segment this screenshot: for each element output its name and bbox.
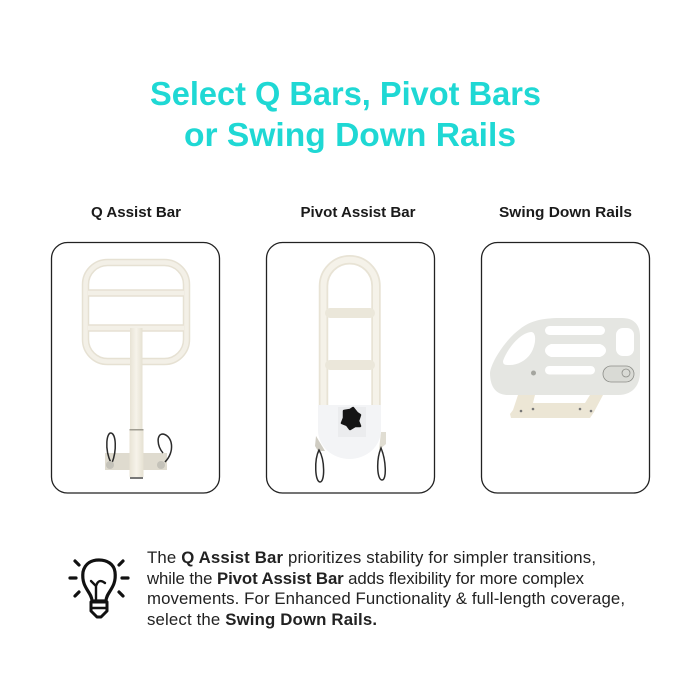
description text: The Q Assist Bar prioritizes stability for simpler transitions, [147, 548, 596, 567]
description text [146, 548, 625, 629]
title [150, 75, 541, 153]
product: pivot bar [315, 260, 386, 482]
product: Q bar [86, 262, 186, 479]
product: swing down rail [490, 318, 640, 418]
description text: select the Swing Down Rails. [147, 610, 377, 629]
panel: Pivot Assist Bar [266, 205, 434, 493]
panel: Swing Down Rails [482, 205, 650, 493]
heading: Pivot Assist Bar: Pivot Assist Bar [300, 205, 416, 221]
icon: light bulb [70, 560, 128, 617]
card outline [52, 242, 220, 493]
heading: Q Assist Bar: Q Assist Bar [91, 205, 181, 221]
description text: while the Pivot Assist Bar adds flexibility for more complex [146, 569, 585, 588]
panel: Q Assist Bar [52, 205, 220, 493]
card outline [266, 242, 434, 493]
heading: Swing Down Rails: Swing Down Rails [499, 205, 632, 221]
card outline [482, 242, 650, 493]
title: or Swing Down Rails [184, 116, 516, 153]
title: Select Q Bars, Pivot Bars [150, 75, 541, 112]
description text: movements. For Enhanced Functionality & full-length coverage, [147, 589, 625, 608]
